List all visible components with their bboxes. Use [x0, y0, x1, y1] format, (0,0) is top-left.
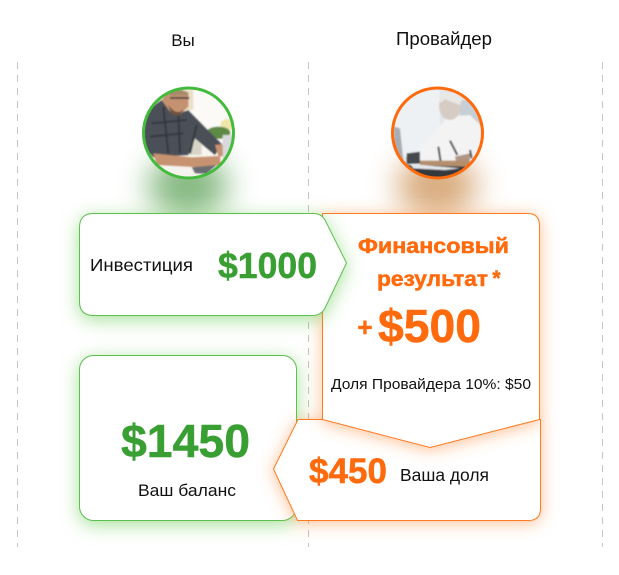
heading: provider: Провайдер [396, 29, 492, 49]
asterisk: * [492, 267, 501, 290]
balance amount: $1450 [121, 415, 250, 467]
plus sign: + [357, 312, 373, 342]
glow under avatar: you [148, 154, 228, 218]
panel: financial result [322, 214, 540, 448]
panel: your share [274, 420, 540, 520]
share label: Ваша доля [400, 465, 489, 485]
panel: investment [80, 214, 346, 316]
investment amount: $1000 [218, 245, 317, 286]
share amount: $450 [309, 452, 387, 491]
avatar: provider [391, 86, 484, 180]
avatar: you [142, 86, 235, 180]
result title: Финансовый [358, 234, 509, 258]
provider share note: Доля Провайдера 10%: $50 [331, 376, 531, 393]
result subtitle: результат [377, 267, 488, 291]
result amount: $500 [378, 300, 481, 352]
panel: balance [80, 356, 296, 520]
balance label: Ваш баланс [138, 481, 237, 500]
investment label: Инвестиция [90, 255, 193, 275]
heading: you: Вы [171, 31, 195, 50]
glow under avatar: provider [397, 154, 477, 218]
